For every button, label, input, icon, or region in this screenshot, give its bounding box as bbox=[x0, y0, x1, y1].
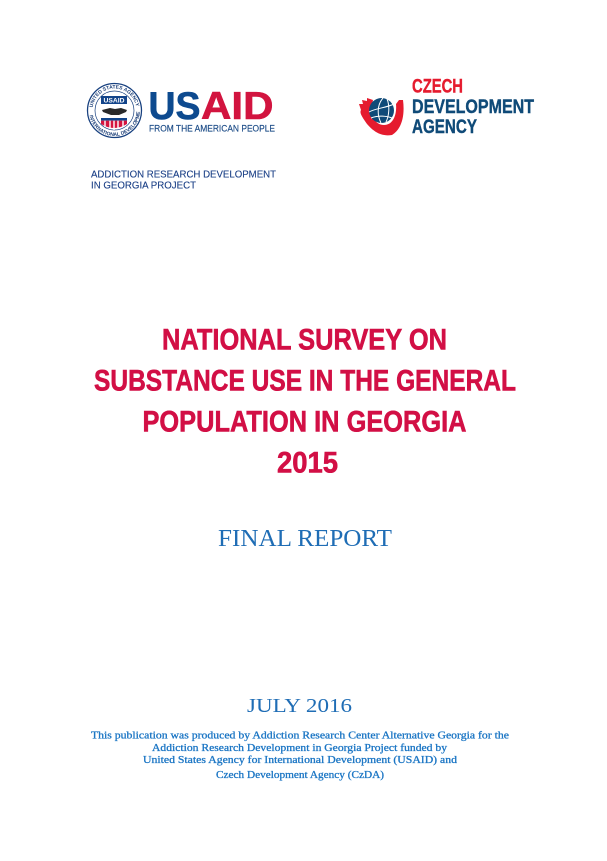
funding statement: Czech Development Agency (CzDA) bbox=[216, 770, 385, 781]
project name: IN GEORGIA PROJECT bbox=[91, 180, 197, 192]
wordmark: Agency: AGENCY bbox=[412, 116, 477, 138]
icon: USAID seal: UNITED STATES AGENCY bbox=[89, 85, 140, 108]
title: POPULATION IN GEORGIA bbox=[142, 406, 466, 438]
wordmark: USAID: US bbox=[148, 85, 200, 128]
title: 2015 bbox=[277, 446, 338, 480]
subtitle: FINAL REPORT bbox=[218, 526, 392, 552]
icon: hand holding globe bbox=[359, 98, 404, 135]
project name: ADDICTION RESEARCH DEVELOPMENT bbox=[91, 168, 277, 180]
wordmark: USAID bbox=[148, 85, 274, 128]
funding statement: United States Agency for International Development (USAID) and bbox=[143, 755, 458, 766]
funding statement: This publication was produced by Addiction Research Center Alternative Georgia for the bbox=[91, 730, 509, 742]
logo: Czech Development Agency bbox=[359, 76, 534, 138]
icon: USAID seal: USAID bbox=[104, 98, 125, 104]
title: SUBSTANCE USE IN THE GENERAL bbox=[94, 364, 516, 398]
title bbox=[94, 324, 516, 480]
project name bbox=[91, 168, 277, 192]
funding statement bbox=[91, 730, 509, 781]
tagline: FROM THE AMERICAN PEOPLE bbox=[149, 124, 275, 134]
wordmark: USAID: AID bbox=[201, 85, 274, 128]
logo: USAID bbox=[86, 82, 275, 138]
date: JULY 2016 bbox=[247, 695, 352, 717]
title: NATIONAL SURVEY ON bbox=[162, 324, 447, 356]
wordmark: Czech: CZECH bbox=[412, 76, 463, 98]
wordmark: Development: DEVELOPMENT bbox=[412, 96, 534, 118]
icon: USAID seal bbox=[86, 82, 142, 138]
funding statement: Addiction Research Development in Georgia Project funded by bbox=[152, 743, 448, 754]
